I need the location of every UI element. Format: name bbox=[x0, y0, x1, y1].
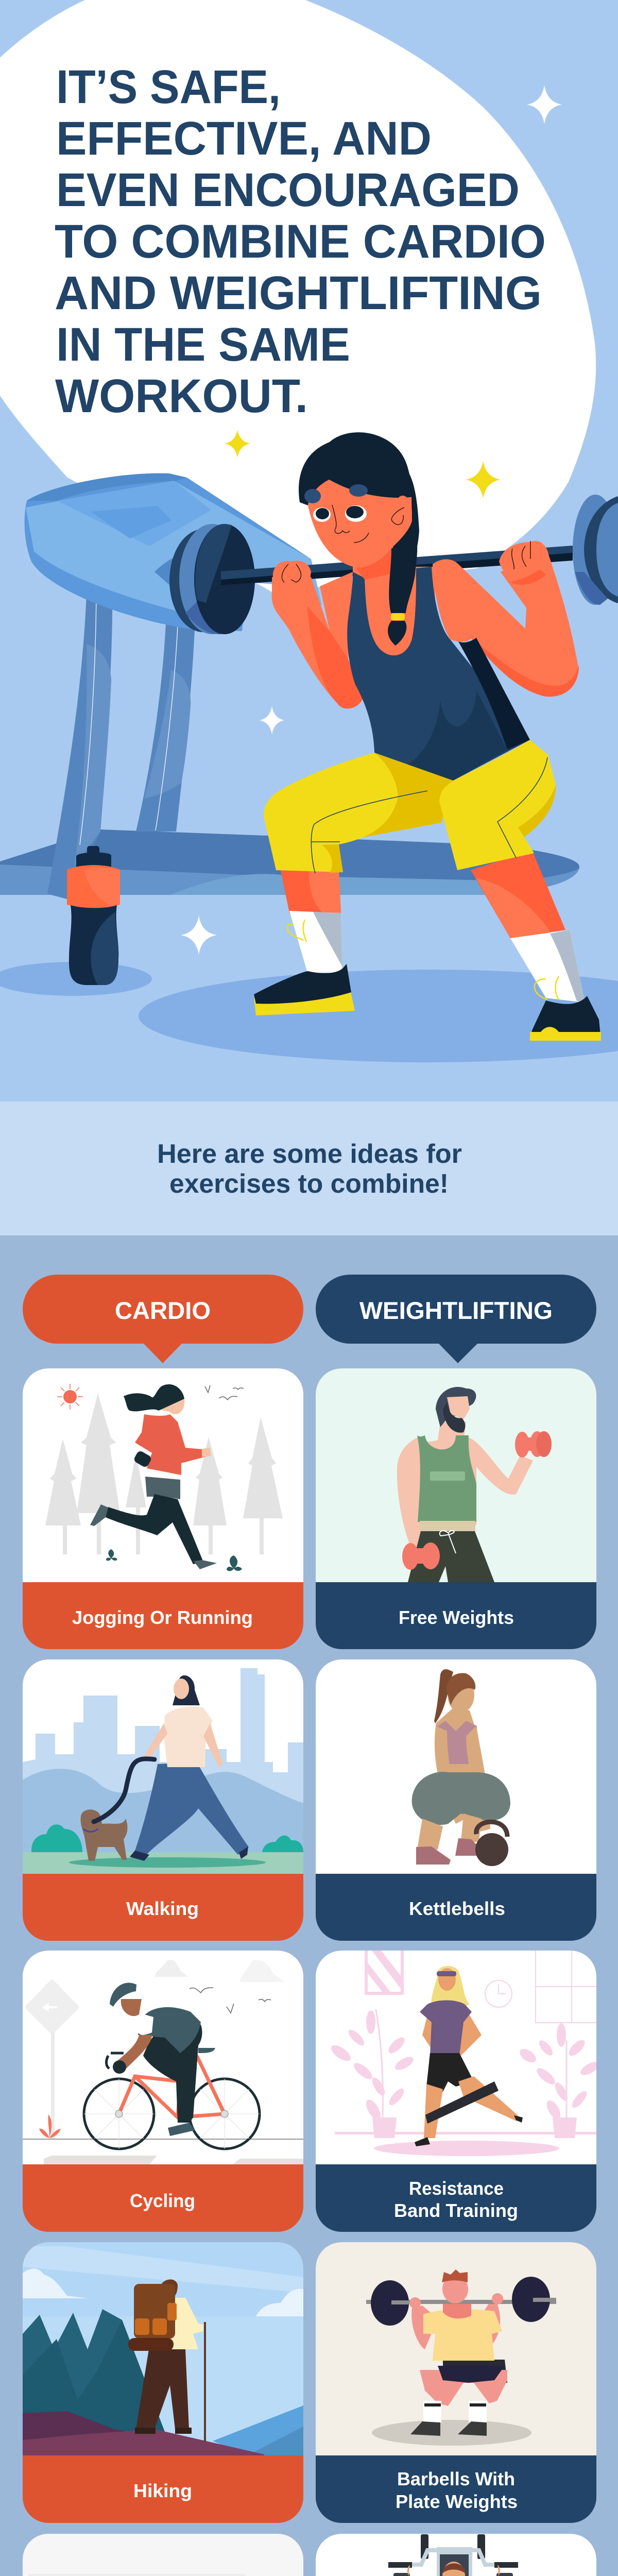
water bottle bbox=[67, 846, 120, 985]
wheels bbox=[84, 2079, 154, 2149]
illustration: runner bbox=[23, 1368, 303, 1582]
runner body bbox=[161, 1395, 184, 1414]
left plate bbox=[169, 524, 255, 634]
illustration: woman with kettlebell bbox=[412, 1669, 510, 1866]
right plate bbox=[573, 495, 618, 605]
caption: Jogging Or Running bbox=[72, 1607, 253, 1628]
panel: hiking bbox=[23, 2242, 303, 2523]
caption: Cycling bbox=[130, 2190, 195, 2211]
illustration: swimmer bbox=[23, 2534, 303, 2576]
illustration: woman walking dog bbox=[23, 1659, 303, 1874]
woman bbox=[135, 1762, 249, 1855]
rider bbox=[143, 2020, 202, 2123]
heading: weightlifting bbox=[316, 1275, 596, 1363]
panel: swimming bbox=[23, 2534, 303, 2576]
frame bbox=[119, 2056, 225, 2117]
panel: barbells bbox=[316, 2242, 596, 2523]
lower legs bbox=[280, 850, 585, 1003]
intro text: Here are some ideas for bbox=[157, 1139, 462, 1169]
title: WORKOUT. bbox=[55, 370, 308, 422]
caption: Resistance bbox=[409, 2178, 504, 2199]
white blob behind title bbox=[0, 0, 596, 592]
floor shadows bbox=[0, 962, 618, 1062]
title: IN THE SAME bbox=[56, 318, 350, 371]
sparkles bbox=[181, 85, 562, 955]
intro text: exercises to combine! bbox=[169, 1169, 449, 1199]
illustration: woman with band bbox=[316, 1951, 601, 2164]
panel: walking bbox=[23, 1659, 303, 1941]
caption: Walking bbox=[126, 1898, 199, 1919]
caption bbox=[396, 2468, 518, 2512]
heading: cardio bbox=[23, 1275, 303, 1363]
panel: cycling bbox=[23, 1951, 303, 2232]
tank top bbox=[347, 567, 530, 781]
title bbox=[55, 61, 546, 422]
hands bbox=[273, 541, 548, 598]
panel: kettlebells bbox=[316, 1659, 596, 1941]
caption: Band Training bbox=[394, 2200, 518, 2221]
shorts bbox=[264, 740, 556, 873]
panel: jogging bbox=[23, 1368, 303, 1649]
panel: hero bbox=[0, 0, 618, 1101]
dog bbox=[81, 1809, 127, 1861]
treadmill bbox=[0, 473, 579, 899]
illustration: man on machine bbox=[388, 2534, 559, 2576]
left arm bbox=[272, 572, 363, 708]
illustration: man squatting barbell bbox=[316, 2242, 596, 2455]
hair bbox=[299, 432, 419, 564]
title: EFFECTIVE, AND bbox=[56, 112, 432, 165]
title: EVEN ENCOURAGED bbox=[56, 164, 520, 216]
caption: Kettlebells bbox=[409, 1898, 505, 1919]
caption: Hiking bbox=[133, 2480, 192, 2501]
caption: Barbells With bbox=[397, 2468, 515, 2489]
barbell bar bbox=[221, 546, 573, 585]
heading: cardio: CARDIO bbox=[115, 1297, 211, 1324]
heading: weightlifting: WEIGHTLIFTING bbox=[359, 1297, 553, 1324]
illustration: hiker bbox=[23, 2242, 303, 2455]
illustration: man with dumbbells bbox=[316, 1368, 596, 1582]
caption bbox=[394, 2178, 518, 2221]
shoes bbox=[254, 920, 601, 1041]
chest bbox=[353, 567, 435, 665]
hiker body bbox=[204, 2322, 206, 2442]
intro text bbox=[157, 1139, 462, 1199]
panel: free weights bbox=[316, 1368, 596, 1649]
title: TO COMBINE CARDIO bbox=[55, 215, 546, 268]
caption: Free Weights bbox=[399, 1607, 514, 1628]
right arm bbox=[433, 551, 578, 697]
face bbox=[304, 480, 412, 568]
title: IT’S SAFE, bbox=[56, 61, 281, 113]
panel: resistance band training bbox=[316, 1951, 601, 2232]
figure bbox=[431, 1966, 470, 2009]
neck bbox=[355, 546, 416, 580]
weightlifter bbox=[169, 432, 618, 1041]
title: AND WEIGHTLIFTING bbox=[55, 267, 542, 319]
panel: intro band bbox=[0, 1101, 618, 1235]
braid bbox=[388, 526, 417, 646]
panel: weight machines bbox=[316, 2534, 596, 2576]
caption: Plate Weights bbox=[396, 2491, 518, 2512]
illustration: cyclist bbox=[23, 1951, 303, 2164]
